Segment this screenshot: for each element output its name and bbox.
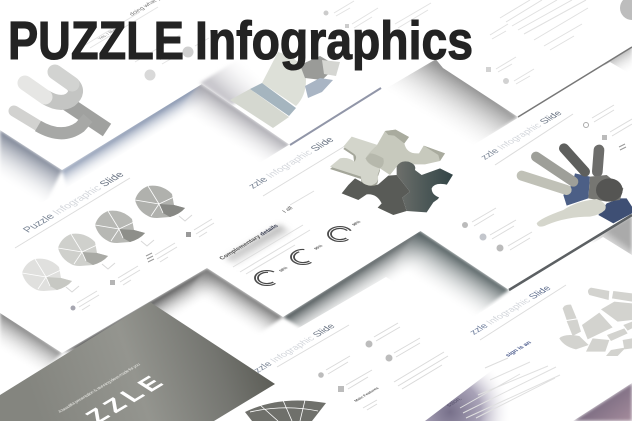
heading suffix: I all: [282, 206, 295, 214]
piece: light: [330, 137, 380, 188]
slide: top right text: [420, 0, 632, 117]
ring chart 2: [286, 246, 320, 268]
slide text: paragraph lines: [490, 0, 588, 84]
icon: corner badge: [620, 0, 632, 20]
slide subtitle line: [263, 146, 345, 196]
icon: list glyphs: [486, 67, 509, 84]
list icons: [318, 340, 392, 392]
slide title: zzle Infographic Slide: [467, 284, 554, 337]
thumb: [537, 199, 606, 227]
ring chart 1: [250, 267, 284, 289]
list items: [462, 105, 632, 252]
lavender shadow wash: [425, 368, 545, 421]
ring labels: 98%: [351, 219, 362, 227]
slide text: cactus list: Yes, I like: [97, 28, 118, 41]
slide: hand with fingers: [419, 47, 632, 290]
finger: pinky: [522, 176, 567, 190]
list text: [326, 323, 448, 410]
heading rule: [485, 358, 508, 368]
main title: Infographics: [195, 11, 473, 71]
head 1: [22, 259, 72, 291]
head 4: [135, 186, 185, 218]
icon: puzzle fan: [245, 398, 326, 421]
icon: sleeve and puzzle sphere: [230, 52, 340, 128]
palm dark spot: [596, 178, 623, 202]
icon: hand: [522, 148, 632, 227]
caption text: ssion.: [446, 397, 464, 408]
slide subtitle line: [495, 114, 573, 165]
slide: dark cover: [0, 302, 275, 421]
ring labels: 58%: [278, 265, 289, 273]
section heading: sign is an: [505, 340, 534, 358]
cover tagline: A beautiful presentation & stunning ideas made for you: [57, 362, 142, 414]
slide text: cactus list: [85, 0, 209, 81]
slide: bottom centre list: [214, 277, 530, 421]
slide subtitle line: [277, 325, 349, 367]
paragraph lines: [460, 362, 560, 418]
ring labels: [278, 219, 362, 273]
icon: 3D jigsaw pieces: [330, 130, 457, 215]
head 2: [58, 234, 108, 266]
paragraph lines: [233, 191, 314, 274]
head 3: [95, 211, 145, 243]
finger: ring: [536, 157, 573, 182]
slide title: Puzzle Infographic Slide: [21, 171, 127, 235]
slide title: zzle Infographic Slide: [478, 109, 565, 162]
slide title: zzle Infographic Slide: [251, 322, 338, 375]
piece: pale olive: [366, 130, 445, 175]
slide: main 3D puzzle: [207, 88, 515, 317]
ring chart 3: [323, 223, 357, 245]
slide: right hand puzzle: [425, 237, 632, 421]
slide text: list items: [324, 1, 431, 28]
piece: dark teal: [397, 161, 457, 212]
slide: heads puzzle: [0, 128, 299, 353]
ring labels: 95%: [313, 243, 324, 251]
slide: cactus: [0, 0, 290, 170]
main title: [8, 11, 473, 71]
palm: [563, 173, 590, 206]
chevrons and list items: [66, 215, 214, 310]
wrist: [598, 198, 632, 223]
section heading: Complementary details: [219, 224, 281, 261]
piece: dark grey: [342, 175, 410, 215]
finger: middle: [564, 148, 585, 172]
palm centre: [588, 175, 623, 202]
slide: hand holding puzzle: [200, 0, 443, 145]
sub heading: Main Features: [353, 386, 380, 403]
icon: cactus: [14, 72, 107, 133]
slide title: zzle Infographic Slide: [246, 136, 337, 191]
slide subtitle line: [480, 285, 566, 340]
icon: block hand: [559, 288, 632, 356]
finger: index: [597, 150, 599, 172]
slide text: cactus list: 1,000: [157, 54, 168, 61]
main title: PUZZLE: [8, 11, 184, 71]
slide subtitle line: [15, 178, 130, 248]
